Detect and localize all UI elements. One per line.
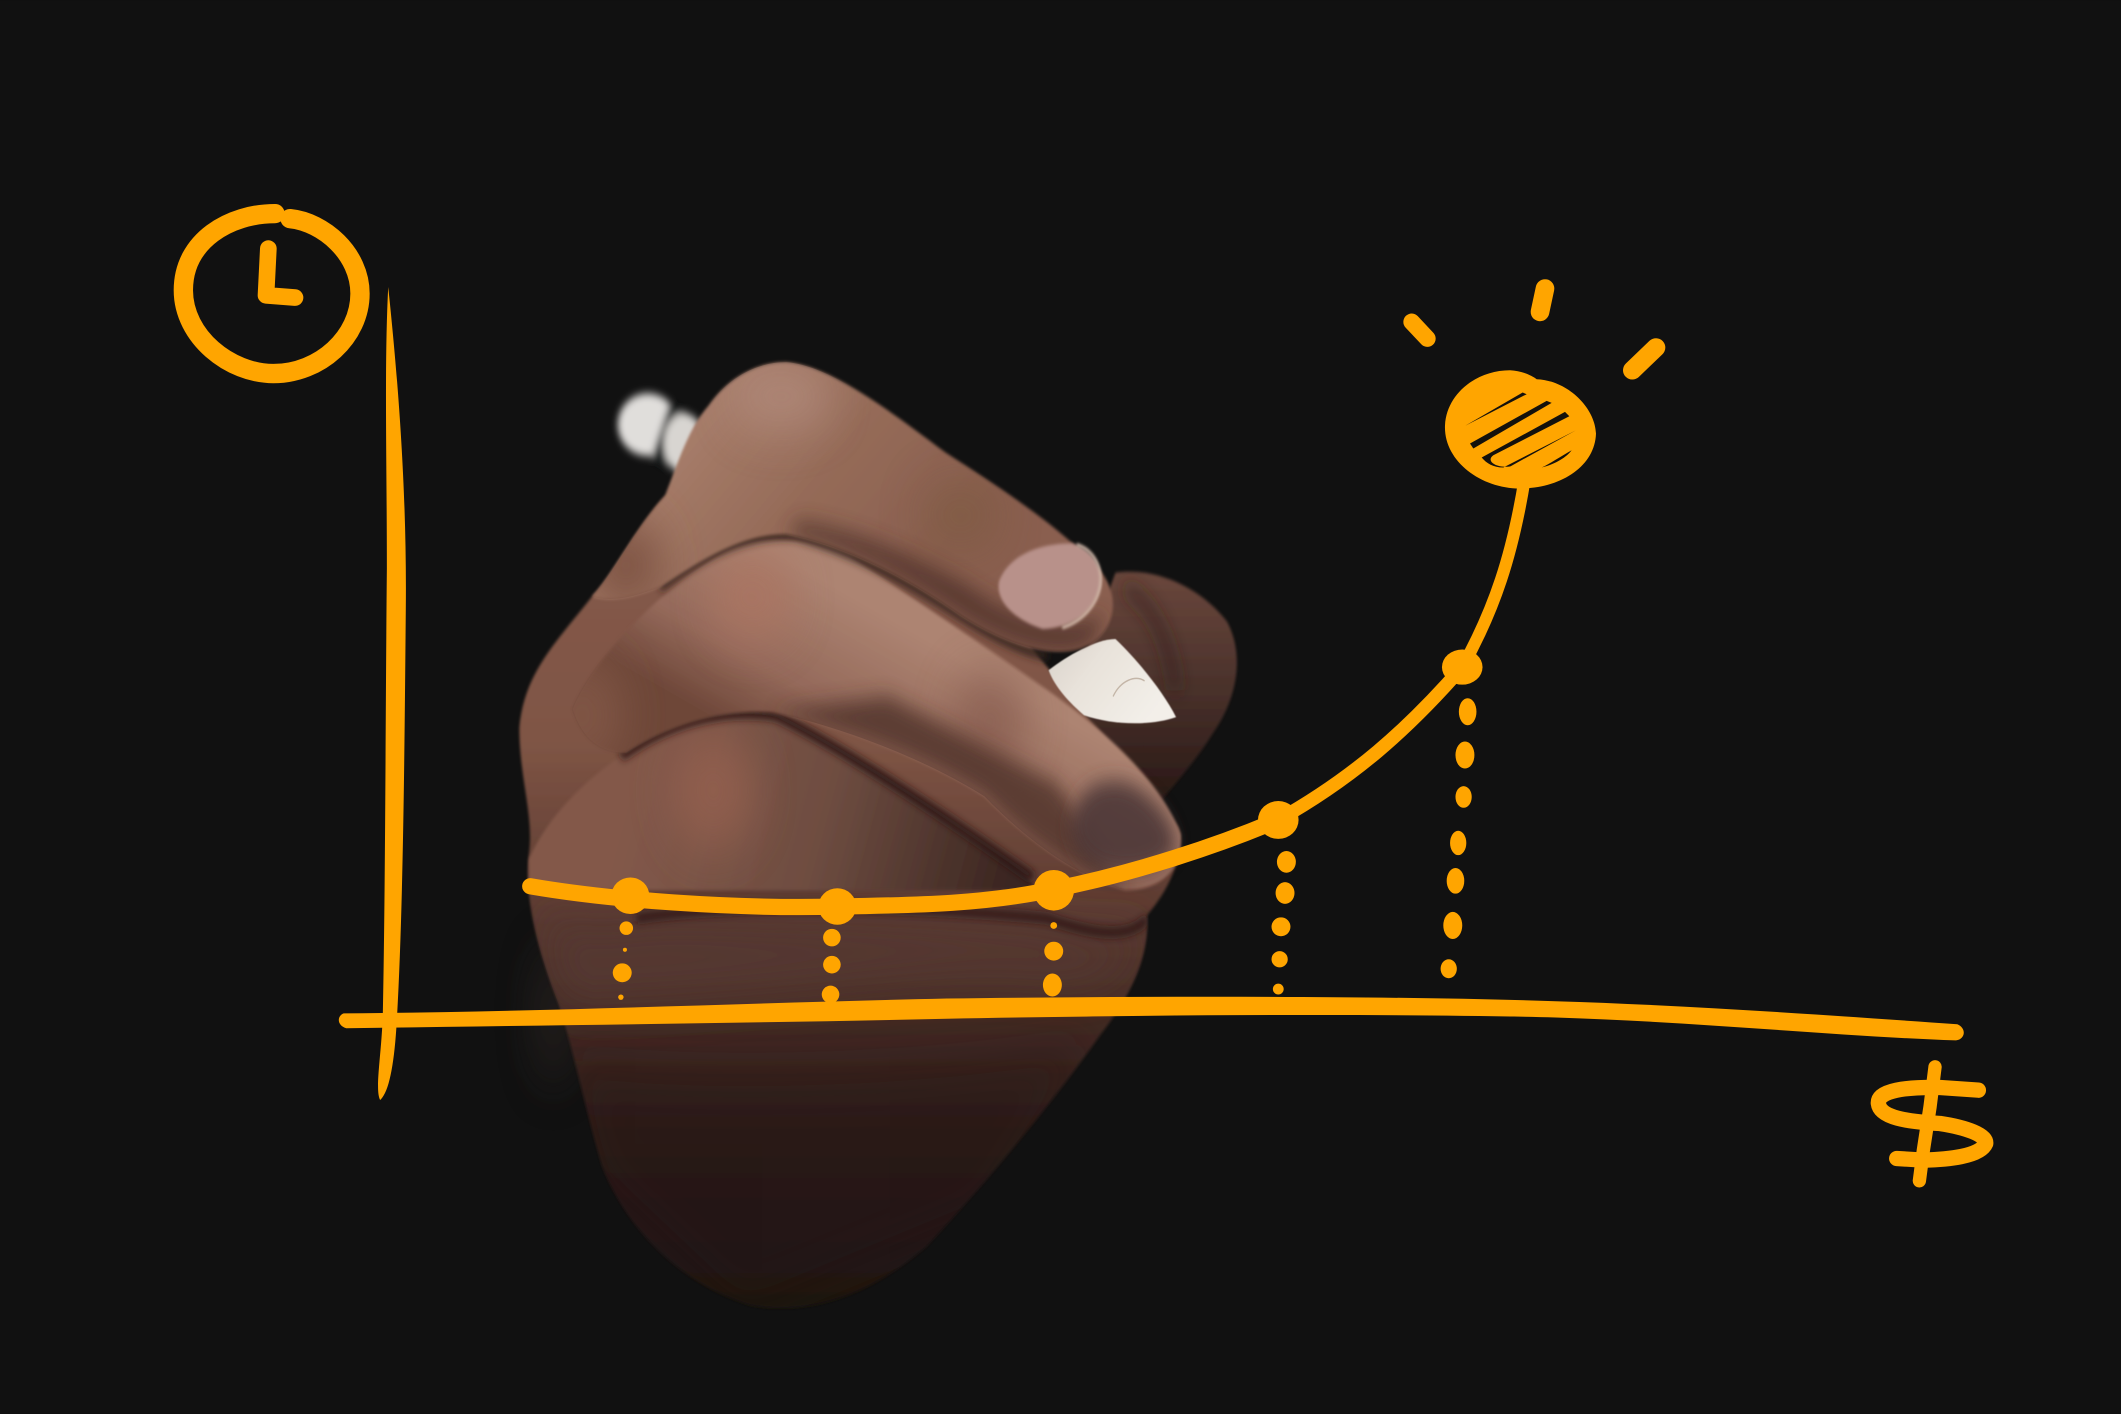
highlighted peak with hatching and spark rays — [1412, 289, 1656, 489]
index finger joint crease — [949, 508, 950, 509]
money axis — [339, 997, 1964, 1040]
palm and lower hand — [519, 465, 1180, 1315]
middle finger left blend — [574, 670, 628, 752]
pen tip — [1049, 639, 1176, 723]
index finger — [587, 362, 1113, 651]
ring finger knuckle — [670, 731, 757, 850]
shadow under index finger — [660, 535, 1048, 656]
dollar icon — [1878, 1067, 1986, 1181]
shadow under middle finger — [621, 713, 1033, 878]
curve points — [611, 877, 649, 914]
hand holding pen, drawn in local coordinates — [519, 362, 1237, 1315]
thumb — [1072, 572, 1237, 815]
index finger left blend — [587, 522, 665, 609]
orange sketch chart — [183, 214, 1986, 1181]
clock icon — [183, 214, 360, 374]
highlighted peak — [1445, 370, 1596, 489]
middle fingernail — [1072, 781, 1176, 872]
dotted drop lines — [613, 698, 1476, 1003]
hatching — [1465, 393, 1576, 468]
spark rays — [1412, 289, 1656, 370]
middle finger — [539, 539, 1181, 890]
middle finger lower shade — [771, 697, 1125, 890]
index finger lower shade — [786, 522, 1106, 651]
middle finger joint — [951, 672, 1028, 771]
index knuckle — [728, 365, 834, 428]
growth curve — [530, 480, 1524, 925]
time axis — [378, 287, 406, 1100]
photo illustration: hand sketching time versus money growth chart — [174, 204, 1994, 1308]
index fingernail highlight — [1062, 545, 1101, 628]
pen back end — [618, 393, 704, 473]
index fingernail — [999, 543, 1101, 629]
palm base shadow — [916, 1082, 1010, 1090]
little finger upper shadow — [636, 908, 1147, 933]
middle finger knuckle — [724, 595, 760, 632]
blurred wrist edge — [536, 946, 570, 1084]
little finger — [538, 942, 760, 1006]
ring finger — [529, 713, 1036, 890]
